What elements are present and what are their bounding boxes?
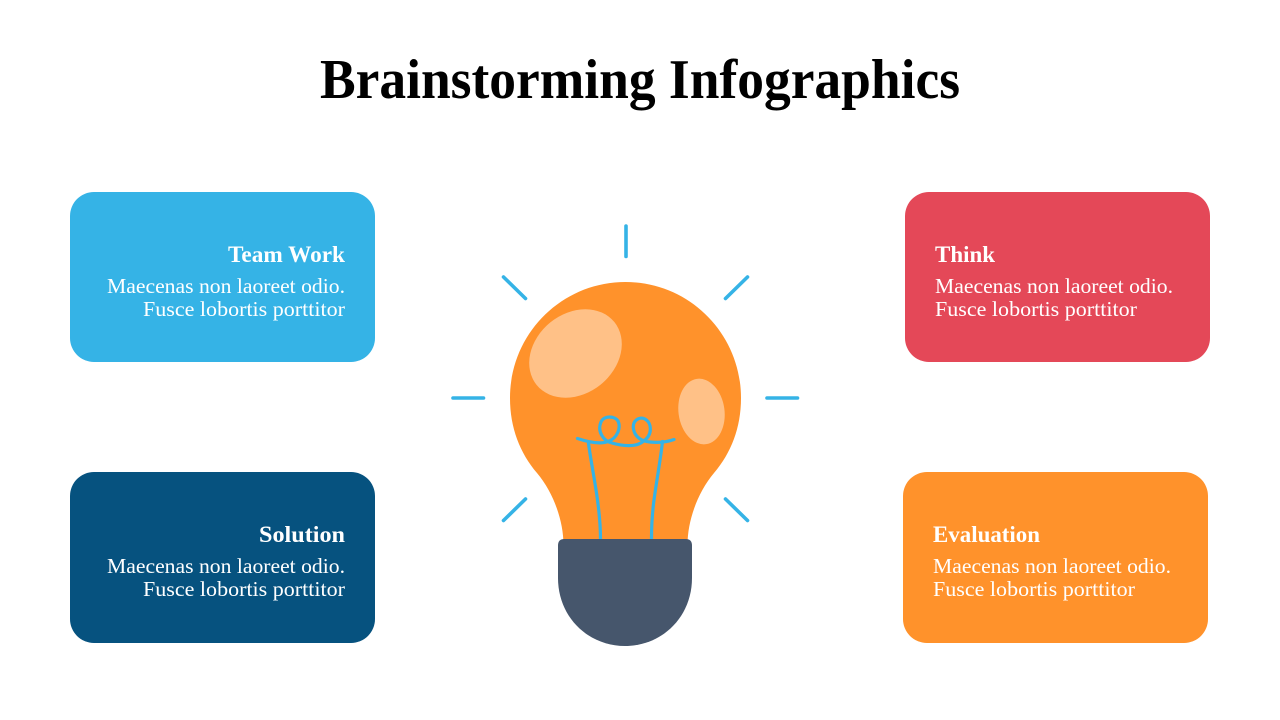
text: evaluation description xyxy=(933,554,1171,601)
bulb glass xyxy=(510,282,741,545)
heading: solution: Solution xyxy=(259,522,345,547)
icon: light rays xyxy=(453,226,798,520)
panel: evaluation xyxy=(903,472,1208,643)
filament xyxy=(578,417,674,539)
panel: solution xyxy=(70,472,375,643)
heading: evaluation: Evaluation xyxy=(933,522,1040,547)
text: team work description: Maecenas non laoreet odio. xyxy=(107,274,345,298)
text: evaluation description: Fusce lobortis porttitor xyxy=(933,577,1135,601)
title: Brainstorming Infographics xyxy=(320,49,960,111)
panel: think xyxy=(905,192,1210,362)
text: solution description: Fusce lobortis porttitor xyxy=(143,577,345,601)
text: solution description: Maecenas non laoreet odio. xyxy=(107,554,345,578)
bulb base xyxy=(558,539,692,646)
text: solution description xyxy=(107,554,345,601)
text: think description: Fusce lobortis porttitor xyxy=(935,297,1137,321)
heading: think: Think xyxy=(935,242,995,267)
text: team work description xyxy=(107,274,345,321)
text: think description xyxy=(935,274,1173,321)
heading: team work: Team Work xyxy=(228,242,345,267)
text: team work description: Fusce lobortis porttitor xyxy=(143,297,345,321)
icon: light bulb xyxy=(453,226,798,646)
text: evaluation description: Maecenas non laoreet odio. xyxy=(933,554,1171,578)
bulb highlights xyxy=(511,291,729,447)
panel: team work xyxy=(70,192,375,362)
text: think description: Maecenas non laoreet odio. xyxy=(935,274,1173,298)
